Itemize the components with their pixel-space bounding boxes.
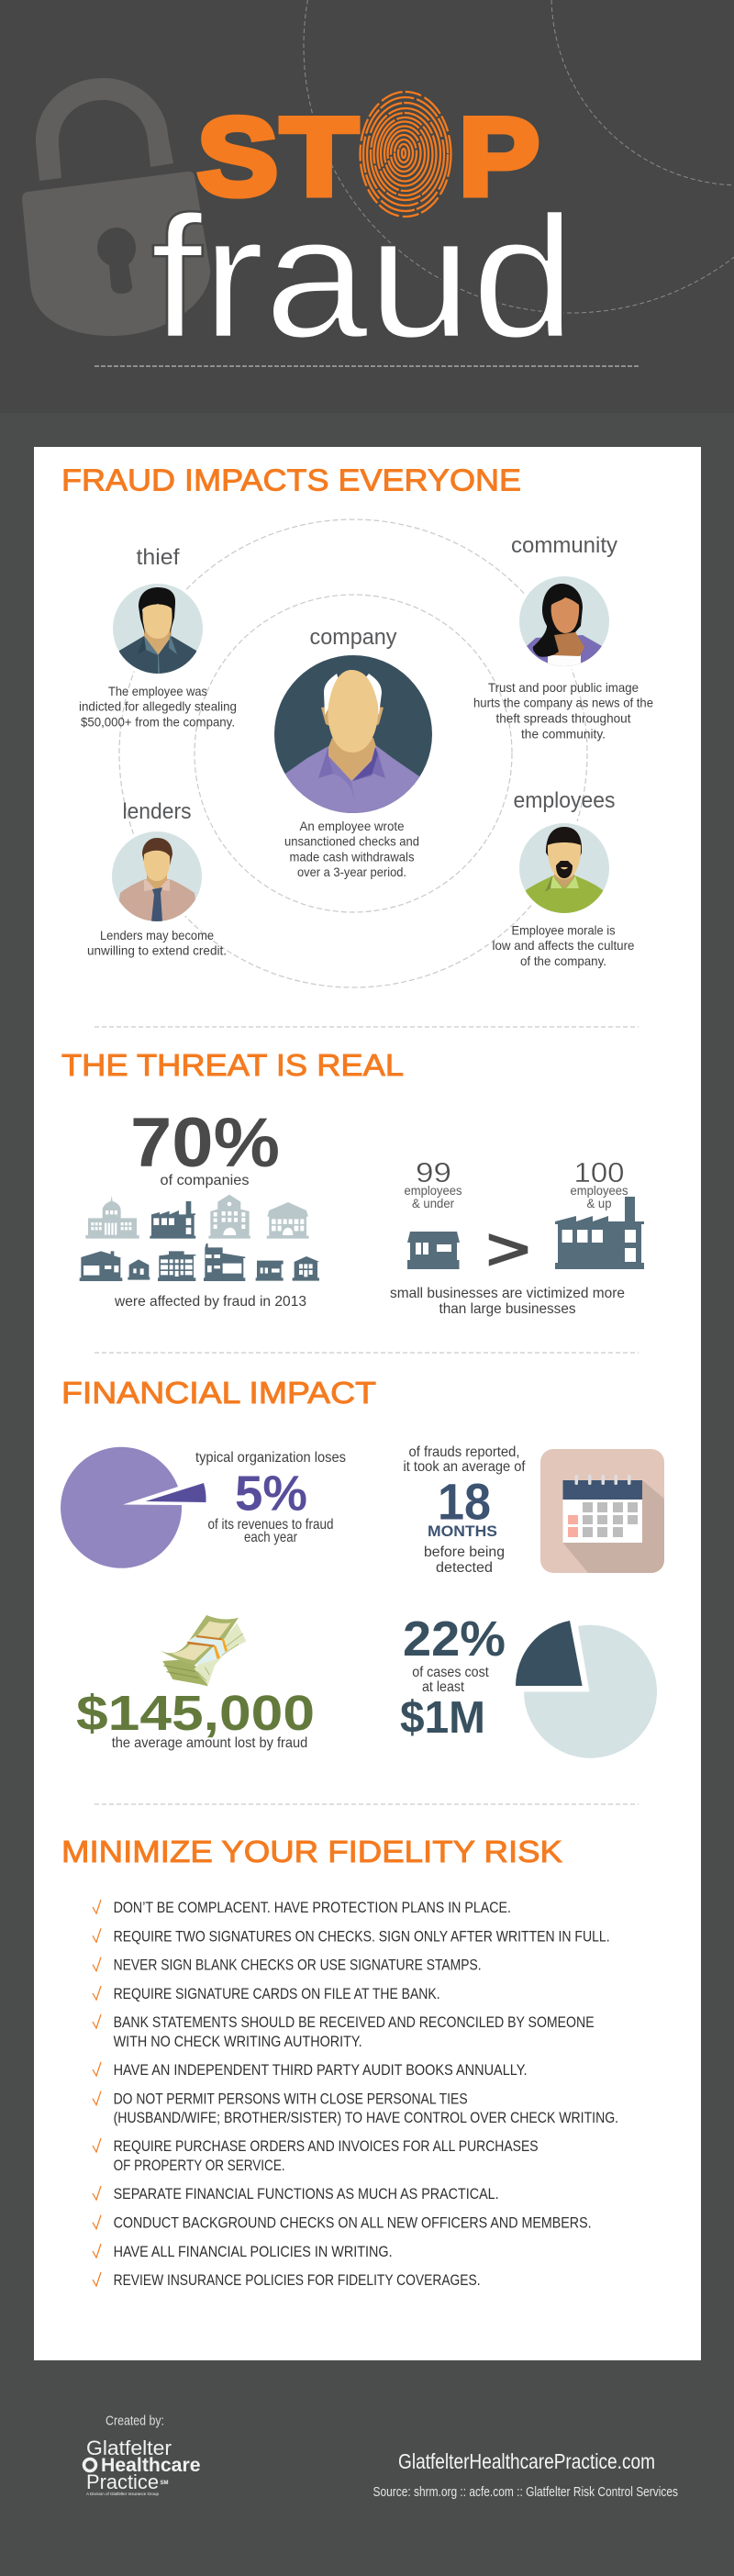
text: typical organization: typical organization loses xyxy=(195,1450,346,1466)
logo: Glatfelter Healthcare Practice: Healthcare xyxy=(101,2455,200,2476)
title: STOP xyxy=(197,95,539,218)
heading: THE THREAT IS REAL xyxy=(61,1048,404,1082)
icon: hall xyxy=(267,1202,309,1239)
title: STOP: P xyxy=(459,95,539,218)
text: lenders description xyxy=(87,928,227,958)
text: small businesses: small businesses are victimized more xyxy=(390,1286,625,1301)
text: company description: made cash withdrawals xyxy=(290,850,415,864)
logo: Glatfelter Healthcare Practice: A Division of Glatfelter Insurance Group xyxy=(86,2492,159,2496)
list items: DON’T BE COMPLACENT. HAVE PROTECTION PLANS IN PLACE. xyxy=(114,1899,511,1916)
text: company description xyxy=(284,819,419,879)
text: community description: Trust and poor public image xyxy=(488,680,639,695)
portrait: company xyxy=(271,652,436,817)
text: before detected: detected xyxy=(436,1560,493,1576)
header xyxy=(22,0,734,374)
icons: checkmarks xyxy=(93,1900,101,2286)
stat: 99: & under xyxy=(412,1196,454,1210)
icon: padlock xyxy=(22,78,210,336)
list items: HAVE AN INDEPENDENT THIRD PARTY AUDIT BOOKS ANNUALLY. xyxy=(114,2061,528,2079)
stat: 5%: 5% xyxy=(235,1466,307,1522)
text: thief description: $50,000+ from the company. xyxy=(81,714,235,729)
text: employees description: Employee morale is xyxy=(512,923,615,938)
stat: 18 months: 18 xyxy=(438,1472,491,1531)
text: of cases cost xyxy=(412,1665,489,1695)
section: the threat is real xyxy=(61,1048,644,1317)
text: before detected: before being xyxy=(424,1544,505,1560)
title: STOP: S xyxy=(197,95,278,218)
logo: Glatfelter Healthcare Practice: SM xyxy=(160,2481,169,2486)
text: small businesses xyxy=(390,1286,625,1317)
logo: Glatfelter Healthcare Practice: Practice xyxy=(86,2470,159,2493)
text: of cases cost: of cases cost xyxy=(412,1665,489,1680)
list items xyxy=(114,1899,618,2289)
text: of companies: of companies xyxy=(160,1173,250,1188)
text: small businesses: than large businesses xyxy=(439,1301,576,1317)
list items: WITH NO CHECK WRITING AUTHORITY. xyxy=(114,2033,362,2050)
text: revenues: each year xyxy=(244,1530,298,1545)
logo: Glatfelter Healthcare Practice xyxy=(84,2437,200,2496)
text: thief description: The employee was xyxy=(108,684,207,698)
text: employees description xyxy=(492,923,635,968)
text: revenues xyxy=(207,1517,334,1545)
list items: OF PROPERTY OR SERVICE. xyxy=(114,2157,285,2174)
text: employees description: of the company. xyxy=(520,953,606,968)
portrait: employees xyxy=(519,820,609,913)
text: of cases cost: at least xyxy=(422,1679,464,1695)
text: community description: hurts the company as news of the xyxy=(473,696,653,710)
section: financial impact xyxy=(61,1376,664,1758)
list items: SEPARATE FINANCIAL FUNCTIONS AS MUCH AS PRACTICAL. xyxy=(114,2185,499,2202)
title: STOP: O xyxy=(367,95,452,218)
text: average amount: the average amount lost by fraud xyxy=(112,1735,307,1751)
icon: small business xyxy=(407,1232,460,1269)
checklist xyxy=(93,1899,618,2289)
stat: 100 xyxy=(571,1156,628,1210)
icon: factory large xyxy=(555,1197,644,1269)
greater-than sign: > xyxy=(486,1216,530,1282)
text: thief description xyxy=(79,684,237,729)
chart: 22% pie xyxy=(516,1621,657,1758)
title: fraud: fraud xyxy=(150,181,575,374)
list items: BANK STATEMENTS SHOULD BE RECEIVED AND RECONCILED BY SOMEONE xyxy=(114,2013,595,2031)
text: before detected xyxy=(424,1544,505,1576)
footer xyxy=(84,2414,678,2500)
label: thief: thief xyxy=(136,545,180,570)
text: community description: the community. xyxy=(521,727,606,742)
icon: calendar xyxy=(540,1449,664,1573)
text: website: GlatfelterHealthcarePractice.com xyxy=(398,2449,655,2473)
list items: REQUIRE SIGNATURE CARDS ON FILE AT THE BANK. xyxy=(114,1985,440,2002)
text: revenues: of its revenues to fraud xyxy=(207,1517,334,1533)
icon: school xyxy=(208,1195,250,1239)
list items: (HUSBAND/WIFE; BROTHER/SISTER) TO HAVE CONTROL OVER CHECK WRITING. xyxy=(114,2109,618,2126)
text: community description xyxy=(473,680,653,742)
text: company description: over a 3-year period. xyxy=(297,864,406,879)
heading: FINANCIAL IMPACT xyxy=(61,1376,376,1410)
icon: fingerprint xyxy=(359,89,452,219)
panel: content xyxy=(34,447,701,2360)
list items: REQUIRE PURCHASE ORDERS AND INVOICES FOR ALL PURCHASES xyxy=(114,2137,539,2155)
icon: row two buildings xyxy=(80,1243,319,1281)
section: fraud impacts everyone xyxy=(61,463,653,987)
list items: REQUIRE TWO SIGNATURES ON CHECKS. SIGN ONLY AFTER WRITTEN IN FULL. xyxy=(114,1927,610,1945)
title: STOP: T xyxy=(281,95,358,218)
portrait: lenders xyxy=(112,831,202,921)
label: employees: employees xyxy=(514,788,615,813)
text: community description: theft spreads throughout xyxy=(495,710,631,725)
stat: 100: 100 xyxy=(574,1156,624,1188)
text: company description: unsanctioned checks and xyxy=(284,833,419,848)
stat: $1M: $1M xyxy=(400,1693,485,1743)
text: company description: An employee wrote xyxy=(299,819,405,833)
chart: 5% pie xyxy=(61,1447,206,1568)
stat: 70%: 70% xyxy=(130,1104,280,1182)
list items: CONDUCT BACKGROUND CHECKS ON ALL NEW OFFICERS AND MEMBERS. xyxy=(114,2214,592,2232)
list items: HAVE ALL FINANCIAL POLICIES IN WRITING. xyxy=(114,2243,393,2260)
heading: MINIMIZE YOUR FIDELITY RISK xyxy=(61,1834,562,1868)
portrait: thief xyxy=(113,584,203,674)
stat: $145,000: $145,000 xyxy=(76,1686,315,1741)
label: community: community xyxy=(511,533,617,558)
list items: REVIEW INSURANCE POLICIES FOR FIDELITY COVERAGES. xyxy=(114,2271,481,2289)
logo: Glatfelter Healthcare Practice: Glatfelter xyxy=(86,2437,172,2459)
text: lenders description: unwilling to extend credit. xyxy=(87,943,227,958)
stat: 99: employees xyxy=(404,1183,462,1198)
text: frauds reported xyxy=(404,1444,526,1475)
list items: NEVER SIGN BLANK CHECKS OR USE SIGNATURE STAMPS. xyxy=(114,1957,482,1974)
list items: DO NOT PERMIT PERSONS WITH CLOSE PERSONAL TIES xyxy=(114,2091,468,2108)
text: affected: were affected by fraud in 2013 xyxy=(114,1294,306,1310)
text: frauds reported: of frauds reported, xyxy=(409,1444,519,1460)
icon: money stack xyxy=(159,1615,246,1686)
label: company: company xyxy=(310,625,396,650)
stat: 18 months: MONTHS xyxy=(428,1522,497,1540)
text: employees description: low and affects the culture xyxy=(492,938,635,953)
stat: 99 xyxy=(404,1156,462,1210)
icon: capitol xyxy=(85,1196,139,1239)
text: frauds reported: it took an average of xyxy=(404,1459,526,1475)
label: lenders: lenders xyxy=(123,799,191,824)
heading: FRAUD IMPACTS EVERYONE xyxy=(61,463,521,497)
stat: 100: employees xyxy=(571,1183,628,1198)
portrait: community xyxy=(519,576,609,670)
section: minimize your fidelity risk xyxy=(61,1834,618,2289)
icons: company buildings xyxy=(80,1195,319,1281)
icon: factory xyxy=(150,1201,195,1239)
text: lenders description: Lenders may become xyxy=(100,928,214,942)
stat: 99: 99 xyxy=(416,1156,451,1188)
text: thief description: indicted for allegedly stealing xyxy=(79,699,237,714)
text: created by: Created by: xyxy=(106,2414,164,2428)
stat: 100: & up xyxy=(587,1196,612,1210)
stat: 22%: 22% xyxy=(403,1611,506,1667)
